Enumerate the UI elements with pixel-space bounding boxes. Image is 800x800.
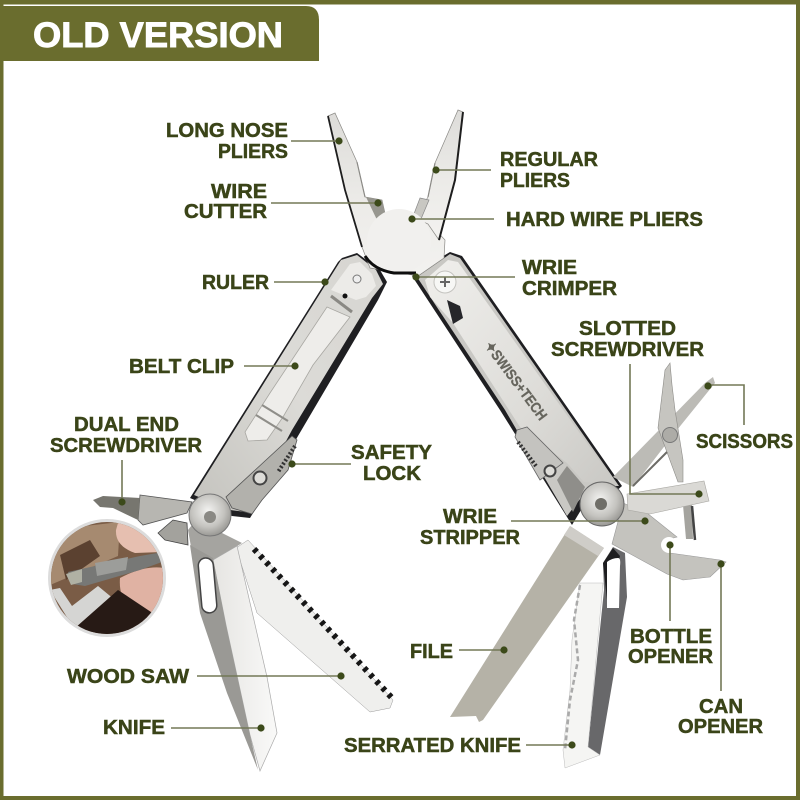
callout: slotted screwdriver: SCREWDRIVER <box>551 339 705 361</box>
callout: belt clip: BELT CLIP <box>129 356 234 378</box>
callout: serrated knife: SERRATED KNIFE <box>344 735 521 757</box>
callout: knife: KNIFE <box>103 717 165 739</box>
right handle <box>412 252 622 525</box>
safety lock left <box>226 436 297 514</box>
header tab <box>0 6 319 61</box>
brand text: ✦SWISS+TECH <box>481 339 550 424</box>
scissors <box>613 363 715 540</box>
callout: long nose pliers <box>166 120 343 163</box>
callout: bottle opener <box>628 541 714 668</box>
callout: ruler: RULER <box>202 272 270 294</box>
callout: can opener: CAN <box>699 696 743 718</box>
callout: dual end screwdriver: SCREWDRIVER <box>50 435 203 457</box>
callout: safety lock: SAFETY <box>351 442 433 464</box>
callout: belt clip <box>129 356 299 378</box>
callout: wire stripper: STRIPPER <box>420 527 521 549</box>
callout: wire crimper: CRIMPER <box>522 278 618 300</box>
callout: wire cutter: CUTTER <box>184 201 268 223</box>
callout: can opener <box>678 560 764 738</box>
callout: safety lock <box>288 442 433 485</box>
callout: bottle opener: OPENER <box>628 646 714 668</box>
callout: regular pliers: REGULAR <box>500 149 599 171</box>
right pivot <box>580 482 624 526</box>
knife <box>188 520 277 771</box>
callout: slotted screwdriver: SLOTTED <box>579 318 676 340</box>
callout: bottle opener: BOTTLE <box>630 626 712 648</box>
knife thumb slot <box>198 557 217 614</box>
photo inset <box>48 519 172 640</box>
callout: file: FILE <box>410 641 453 663</box>
pliers jaws <box>328 110 463 276</box>
serrated knife slot <box>607 558 620 608</box>
callout: regular pliers <box>432 149 599 192</box>
multi-tool illustration <box>48 110 726 771</box>
callout: file <box>410 641 508 663</box>
callout: knife <box>103 717 265 739</box>
callout: wood saw <box>67 666 345 688</box>
left pivot <box>189 494 231 536</box>
file <box>450 526 604 722</box>
bottle and can opener <box>612 503 726 580</box>
callout: dual end screwdriver <box>50 414 203 506</box>
callout: slotted screwdriver <box>551 318 705 498</box>
callout: wire cutter <box>184 181 382 223</box>
callout: scissors: SCISSORS <box>696 431 793 453</box>
callout: dual end screwdriver: DUAL END <box>74 414 179 436</box>
belt clip <box>245 307 350 441</box>
serrated knife <box>563 547 627 768</box>
callout: hard wire pliers <box>408 209 703 231</box>
callout: safety lock: LOCK <box>363 463 422 485</box>
callout: wire stripper <box>420 506 649 549</box>
callout: long nose pliers: LONG NOSE <box>166 120 288 142</box>
callout: hard wire pliers: HARD WIRE PLIERS <box>506 209 703 231</box>
title: OLD VERSION <box>33 16 283 55</box>
callout: wood saw: WOOD SAW <box>67 666 189 688</box>
callout: wire cutter: WIRE <box>211 181 267 203</box>
callout: scissors <box>696 382 793 453</box>
callout: regular pliers: PLIERS <box>500 170 570 192</box>
callout: wire crimper <box>412 257 618 300</box>
callout: can opener: OPENER <box>678 716 764 738</box>
callout: ruler <box>202 272 329 294</box>
wood saw <box>236 540 393 712</box>
dual end screwdriver <box>93 495 192 545</box>
callout: wire stripper: WRIE <box>443 506 497 528</box>
callout: long nose pliers: PLIERS <box>218 141 288 163</box>
slotted screwdriver <box>627 481 709 514</box>
callout: wire crimper: WRIE <box>522 257 577 279</box>
left handle <box>190 253 387 518</box>
